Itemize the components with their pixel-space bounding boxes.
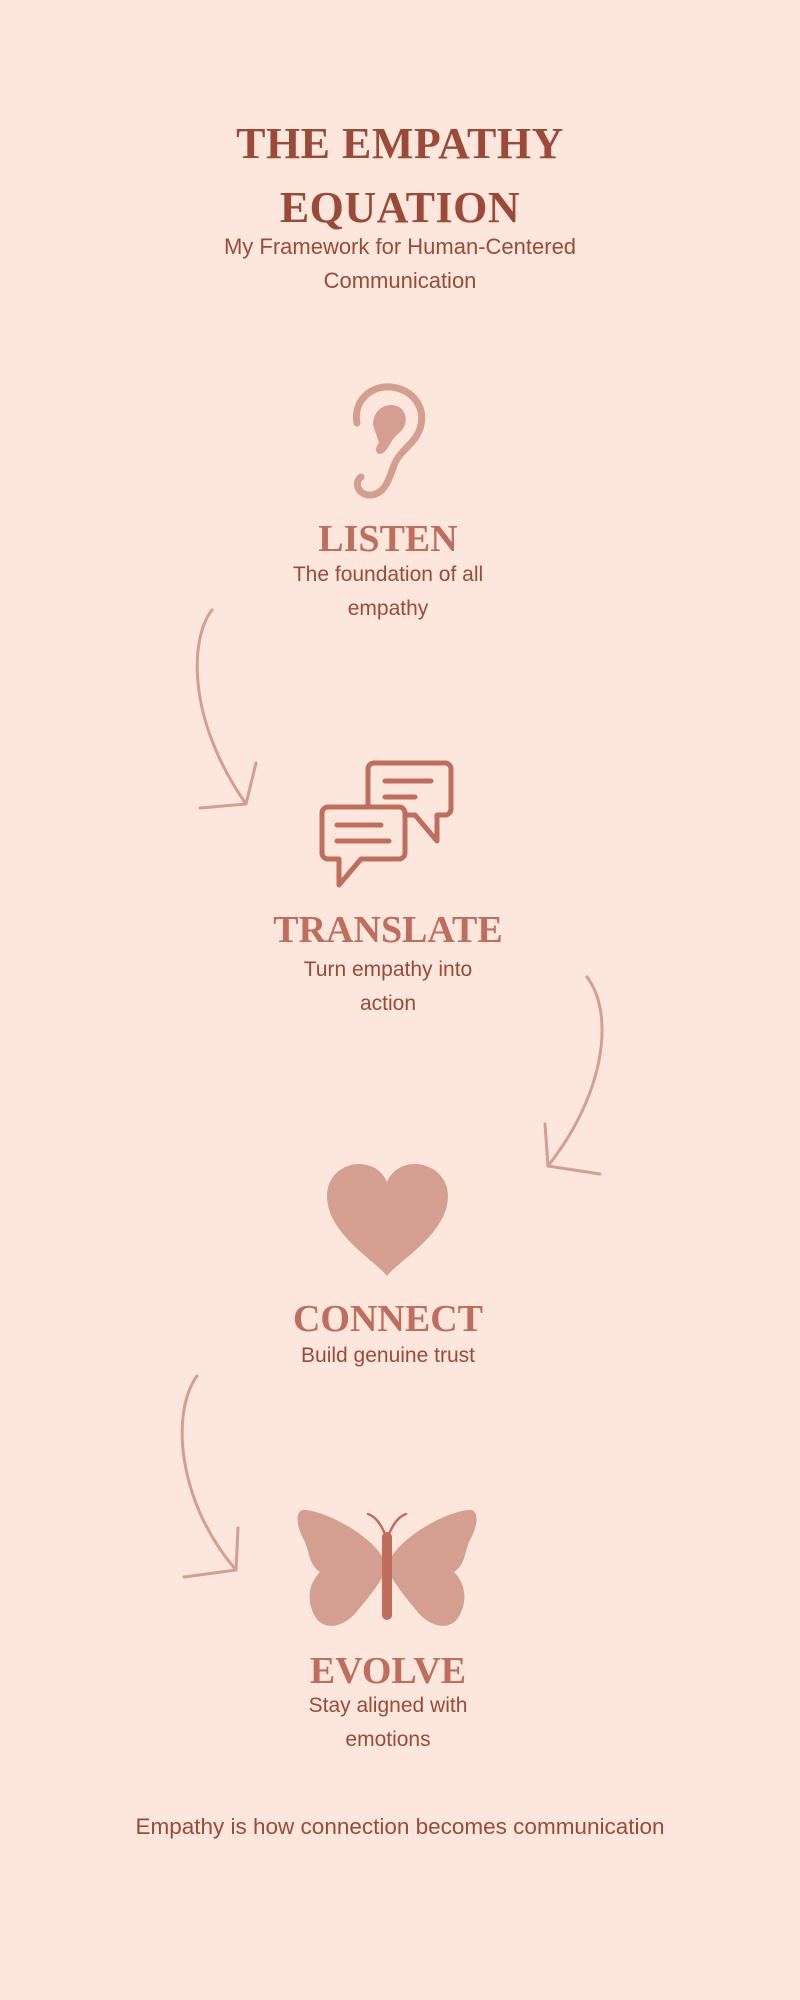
title: THE EMPATHY [236, 119, 564, 168]
heading: listen: LISTEN [318, 518, 458, 560]
arrow 1 [196, 608, 258, 810]
title: EQUATION [280, 183, 520, 232]
title [236, 119, 564, 232]
icon: ear [352, 383, 426, 498]
subtitle: My Framework for Human-Centered [224, 234, 576, 259]
heading: evolve: EVOLVE [310, 1650, 466, 1692]
text: connect: Build genuine trust [301, 1344, 475, 1367]
text: listen [293, 563, 483, 620]
subtitle [224, 234, 576, 293]
footer tagline: Empathy is how connection becomes communication [135, 1814, 664, 1839]
subtitle: Communication [324, 268, 476, 293]
text: translate: action [360, 992, 416, 1015]
text: translate [304, 958, 472, 1015]
text: evolve: Stay aligned with [309, 1694, 467, 1717]
arrow 3 [180, 1374, 240, 1578]
icon: chat bubbles [320, 760, 454, 888]
arrow 2 [544, 975, 604, 1176]
heading: connect: CONNECT [293, 1298, 483, 1340]
heading: translate: TRANSLATE [273, 909, 503, 951]
icon: butterfly [298, 1510, 476, 1626]
icon: heart [327, 1164, 448, 1276]
text: evolve: emotions [345, 1728, 431, 1751]
text: listen: empathy [348, 597, 428, 620]
text: evolve [309, 1694, 467, 1751]
text: translate: Turn empathy into [304, 958, 472, 981]
text: listen: The foundation of all [293, 563, 483, 586]
